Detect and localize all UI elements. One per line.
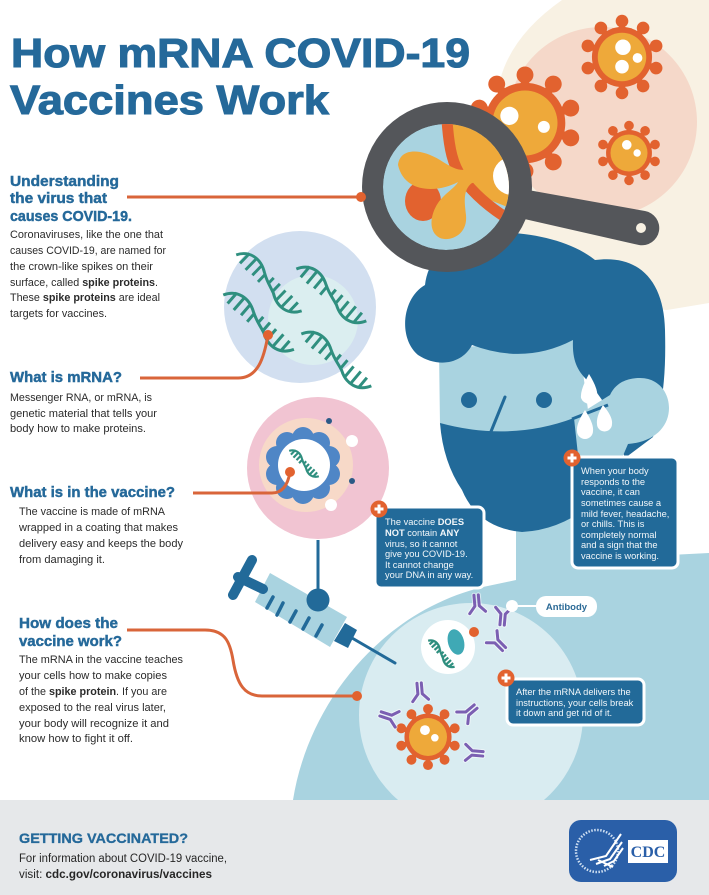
body text [10, 229, 166, 320]
body text: genetic material that tells your [10, 408, 157, 420]
connector line [140, 330, 273, 378]
footer text: visit: cdc.gov/coronavirus/vaccines [19, 869, 212, 881]
illustration: cream background shape [500, 0, 709, 310]
callout: mRNA broken down: it down and get rid of it. [516, 708, 612, 718]
callout: side effects: mild fever, headache, [581, 509, 669, 519]
callout: side effects [564, 450, 678, 568]
callout: mRNA broken down [498, 670, 644, 725]
lens contents [383, 124, 509, 250]
footer heading: GETTING VACCINATED? [19, 830, 188, 846]
heading: the virus that [10, 190, 107, 207]
callout: vaccine does not contain virus: NOT contain ANY [385, 528, 459, 538]
body text: These spike proteins are ideal [10, 292, 160, 304]
callout: side effects: vaccine, it can [581, 487, 640, 497]
panel: footer [0, 800, 709, 895]
body text: exposed to the real virus later, [19, 702, 166, 714]
heading: What is in the vaccine? [10, 484, 175, 501]
body text: Coronaviruses, like the one that [10, 229, 163, 241]
icon: CDC logo [569, 820, 677, 882]
callout: vaccine does not contain virus: It cannot change [385, 560, 454, 570]
body text: know how to fight it off. [19, 733, 133, 745]
mask [440, 418, 590, 532]
title: How mRNA COVID-19 [11, 30, 470, 76]
body text: from damaging it. [19, 554, 105, 566]
neck [516, 500, 582, 582]
icon: plus [564, 450, 580, 466]
lipid coating [266, 427, 340, 504]
body text [19, 654, 184, 745]
illustration: vaccine circle [247, 397, 389, 539]
icon: top virus [580, 15, 664, 99]
eye left [461, 392, 477, 408]
hair [405, 232, 665, 458]
connector line [127, 192, 366, 202]
body text: The mRNA in the vaccine teaches [19, 654, 184, 666]
panel: how does the vaccine work [19, 615, 362, 745]
icon: virus with antibodies [378, 682, 484, 770]
heading: vaccine work? [19, 633, 122, 650]
body text: targets for vaccines. [10, 308, 107, 320]
body text [10, 392, 157, 435]
heading: Understanding [10, 173, 119, 190]
panel: understanding the virus [10, 173, 366, 320]
panel: what is in the vaccine [10, 467, 295, 566]
callout: side effects: completely normal [581, 530, 656, 540]
illustration: cell with mRNA [421, 620, 479, 674]
label: antibody [506, 596, 597, 617]
icon: plus [498, 670, 514, 686]
handle [520, 190, 659, 245]
icon: plus [370, 500, 388, 518]
callout: vaccine does not contain virus: The vaccine DOES [385, 517, 464, 527]
heading [10, 173, 132, 225]
callout: side effects: or chills. This is [581, 519, 645, 529]
illustration: inner body circle [359, 603, 582, 800]
callout: vaccine does not contain virus: virus, so it cannot [385, 539, 458, 549]
body text [18, 506, 184, 566]
icon: CDC logo: CDC [631, 844, 665, 861]
callout: side effects: responds to the [581, 477, 645, 487]
icon: magnifying glass [362, 102, 659, 272]
callout: side effects: vaccine is working. [581, 551, 659, 561]
body text: your cells how to make copies [19, 670, 168, 682]
connector line [193, 467, 295, 493]
body text: The vaccine is made of mRNA [19, 506, 166, 518]
icon: large virus [469, 66, 581, 180]
callout: mRNA broken down: instructions, your cells break [516, 698, 634, 708]
heading: causes COVID-19. [10, 208, 132, 225]
body text: body how to make proteins. [10, 423, 146, 435]
body text: causes COVID-19, are named for [10, 245, 166, 257]
eye right [536, 392, 552, 408]
body text: delivery easy and keeps the body [19, 538, 184, 550]
callout: side effects: When your body [581, 466, 649, 476]
tears [577, 374, 612, 439]
lens rim [362, 102, 532, 272]
body text: Messenger RNA, or mRNA, is [10, 392, 153, 404]
label: antibody: Antibody [546, 602, 588, 613]
callout: vaccine does not contain virus: give you COVID-19. [385, 549, 468, 559]
callout: side effects: sometimes cause a [581, 498, 662, 508]
illustration: shoulders [293, 553, 709, 800]
body text: the crown-like spikes on their [10, 261, 153, 273]
handle hole [636, 223, 646, 233]
footer text: For information about COVID-19 vaccine, [19, 853, 227, 865]
icon: syringe [233, 540, 395, 663]
icon: small virus [597, 121, 661, 185]
illustration: mRNA circle [219, 231, 376, 395]
callout: vaccine does not contain virus [370, 500, 484, 588]
body text: surface, called spike proteins. [10, 277, 158, 289]
hand [570, 378, 669, 458]
body text: your body will recognize it and [19, 718, 169, 730]
icons: antibodies near cell [468, 594, 512, 655]
mask strap [572, 405, 608, 419]
callout: mRNA broken down: After the mRNA delivers the [516, 687, 631, 697]
heading: How does the [19, 615, 118, 632]
illustration: person with mask [405, 232, 669, 582]
heading: What is mRNA? [10, 369, 122, 386]
face [439, 335, 590, 440]
illustration: peach circle behind viruses [507, 27, 697, 217]
body text: wrapped in a coating that makes [18, 522, 179, 534]
footer text [19, 853, 227, 881]
callout: side effects: and a sign that the [581, 540, 658, 550]
heading [19, 615, 122, 650]
title: Vaccines Work [10, 77, 329, 123]
panel: what is mRNA [10, 330, 273, 435]
title [10, 30, 470, 123]
nose [490, 397, 505, 434]
connector line [127, 630, 362, 701]
callout: vaccine does not contain virus: your DNA in any way. [385, 570, 473, 580]
body text: of the spike protein. If you are [19, 686, 167, 698]
